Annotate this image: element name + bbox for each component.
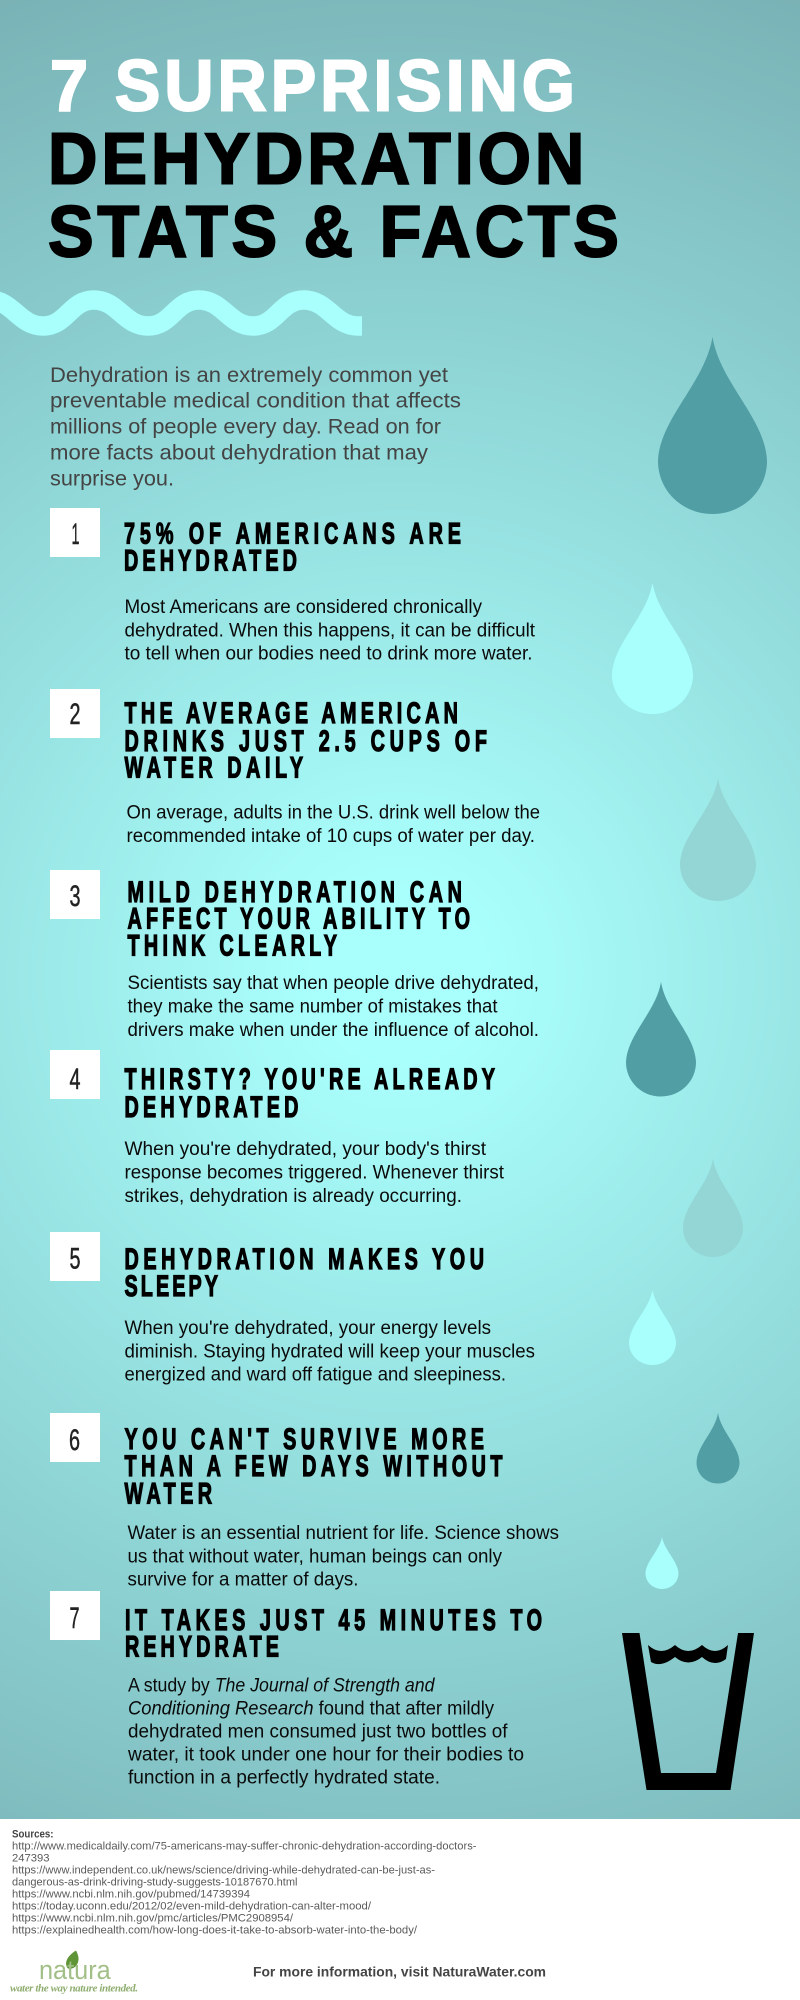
number badge 1: 1 [72,518,80,551]
body 7: Conditioning Research found that after mildly [128,1698,494,1720]
body 7: function in a perfectly hydrated state. [128,1768,440,1788]
title line 2: DEHYDRATION [48,118,584,199]
icon: light drop [646,1537,678,1589]
body 2: On average, adults in the U.S. drink well below the [126,802,540,824]
body 4 [124,1139,505,1207]
number badge 2: 2 [70,698,80,731]
icon: light drop [612,583,693,714]
body 1: Most Americans are considered chronically [124,597,482,618]
heading 7: REHYDRATE [125,1631,279,1664]
footer panel [0,1819,800,2000]
number badge 2 [50,689,100,738]
body 4: When you're dehydrated, your body's thirst [124,1139,487,1160]
body 3: Scientists say that when people drive dehydrated, [128,973,539,994]
body 6: Water is an essential nutrient for life. Science shows [128,1523,559,1544]
icon: light drop [629,1290,676,1365]
body 3 [128,973,539,1041]
body 7: A study by The Journal of Strength and [128,1676,436,1696]
title [48,45,619,272]
heading 3: AFFECT YOUR ABILITY TO [128,903,470,936]
icon: leaf [66,1950,78,1969]
icon: muted drop [680,778,756,901]
number badge 3: 3 [70,880,80,913]
heading 1 [124,518,461,578]
water surface [648,1645,728,1664]
heading 5: DEHYDRATION MAKES YOU [124,1243,484,1276]
heading 7: IT TAKES JUST 45 MINUTES TO [125,1604,542,1637]
fact 3 [50,870,539,1041]
body 5: energized and ward off fatigue and sleepiness. [124,1364,506,1386]
heading 2: DRINKS JUST 2.5 CUPS OF [124,725,487,758]
heading 4: THIRSTY? YOU'RE ALREADY [124,1063,495,1096]
sources: http://www.medicaldaily.com/75-americans-may-suffer-chronic-dehydration-according-doctors- [12,1840,477,1852]
fact 1 [50,508,536,664]
sources: https://www.ncbi.nlm.nih.gov/pubmed/14739394 [12,1888,250,1900]
heading 2 [124,697,487,785]
intro text: surprise you. [50,468,174,490]
heading 5 [124,1243,484,1303]
heading 3 [128,876,470,963]
intro text: millions of people every day. Read on for [50,416,441,438]
body 3: drivers make when under the influence of alcohol. [128,1020,539,1041]
heading 2: WATER DAILY [124,752,303,785]
body 6: us that without water, human beings can only [128,1546,502,1568]
fact 4 [50,1050,505,1207]
icon: large dark drop [658,337,767,514]
heading 2: THE AVERAGE AMERICAN [124,697,458,730]
logo wordmark: natura [39,1955,112,1985]
title line 1: 7 SURPRISING [50,45,575,126]
heading 1: DEHYDRATED [124,545,297,578]
intro text: preventable medical condition that affects [50,390,461,412]
logo tagline: water the way nature intended. [10,1982,138,1994]
sources: 247393 [12,1852,50,1864]
title line 3: STATS & FACTS [48,191,619,272]
glass outline [622,1633,754,1790]
body 5: When you're dehydrated, your energy levels [124,1318,491,1339]
body 4: strikes, dehydration is already occurring. [124,1186,462,1207]
icon: dark drop [696,1413,740,1484]
heading 1: 75% OF AMERICANS ARE [124,518,461,551]
number badge 5 [50,1232,100,1281]
body 7 [127,1676,524,1788]
fact 2 [50,689,540,847]
heading 6: YOU CAN'T SURVIVE MORE [124,1423,484,1456]
sources: dangerous-as-drink-driving-study-suggests-10187670.html [12,1876,297,1888]
heading 6: WATER [124,1478,212,1511]
body 7: water, it took under one hour for their bodies to [127,1744,524,1766]
number badge 5: 5 [70,1242,80,1276]
icon: dark drop [626,982,696,1096]
body 1: to tell when our bodies need to drink more water. [124,644,532,664]
body 2: recommended intake of 10 cups of water per day. [126,826,535,847]
number badge 6: 6 [69,1424,80,1457]
body 1 [124,597,536,664]
icon: glass of water [622,1633,754,1790]
heading 7 [125,1604,542,1664]
heading 5: SLEEPY [124,1270,218,1303]
number badge 3 [50,870,100,919]
number badge 4: 4 [70,1063,80,1096]
sources: Sources: [12,1828,54,1840]
fact 5 [50,1232,535,1386]
number badge 7: 7 [70,1602,80,1635]
heading 4 [124,1063,495,1124]
body 4: response becomes triggered. Whenever thirst [124,1162,505,1184]
intro text [50,364,461,490]
body 1: dehydrated. When this happens, it can be difficult [124,620,536,642]
body 6: survive for a matter of days. [128,1570,358,1590]
body 5: diminish. Staying hydrated will keep your muscles [124,1342,535,1362]
body 3: they make the same number of mistakes that [128,996,498,1018]
number badge 1 [50,508,100,557]
body 2 [126,802,540,847]
wave divider [0,300,362,326]
footer call to action: For more information, visit NaturaWater.com [253,1964,546,1980]
body 7: dehydrated men consumed just two bottles of [128,1722,508,1742]
sources: https://www.independent.co.uk/news/science/driving-while-dehydrated-can-be-just-as- [12,1864,435,1876]
body 6 [128,1523,559,1590]
sources [12,1828,477,1936]
logo: natura [10,1950,138,1994]
heading 6: THAN A FEW DAYS WITHOUT [124,1450,503,1483]
sources: https://today.uconn.edu/2012/02/even-mild-dehydration-can-alter-mood/ [12,1900,371,1912]
intro text: Dehydration is an extremely common yet [50,364,448,387]
fact 6 [50,1413,559,1590]
intro text: more facts about dehydration that may [50,442,429,464]
number badge 6 [50,1413,100,1462]
heading 3: MILD DEHYDRATION CAN [128,876,462,909]
icon: muted drop [683,1159,743,1257]
sources: https://www.ncbi.nlm.nih.gov/pmc/articles/PMC2908954/ [12,1912,293,1924]
fact 7 [50,1591,542,1788]
number badge 4 [50,1050,100,1099]
heading 3: THINK CLEARLY [128,930,337,963]
body 5 [124,1318,535,1386]
number badge 7 [50,1591,100,1640]
heading 4: DEHYDRATED [124,1091,298,1124]
heading 6 [124,1423,503,1511]
sources: https://explainedhealth.com/how-long-does-it-take-to-absorb-water-into-the-body/ [12,1924,417,1936]
